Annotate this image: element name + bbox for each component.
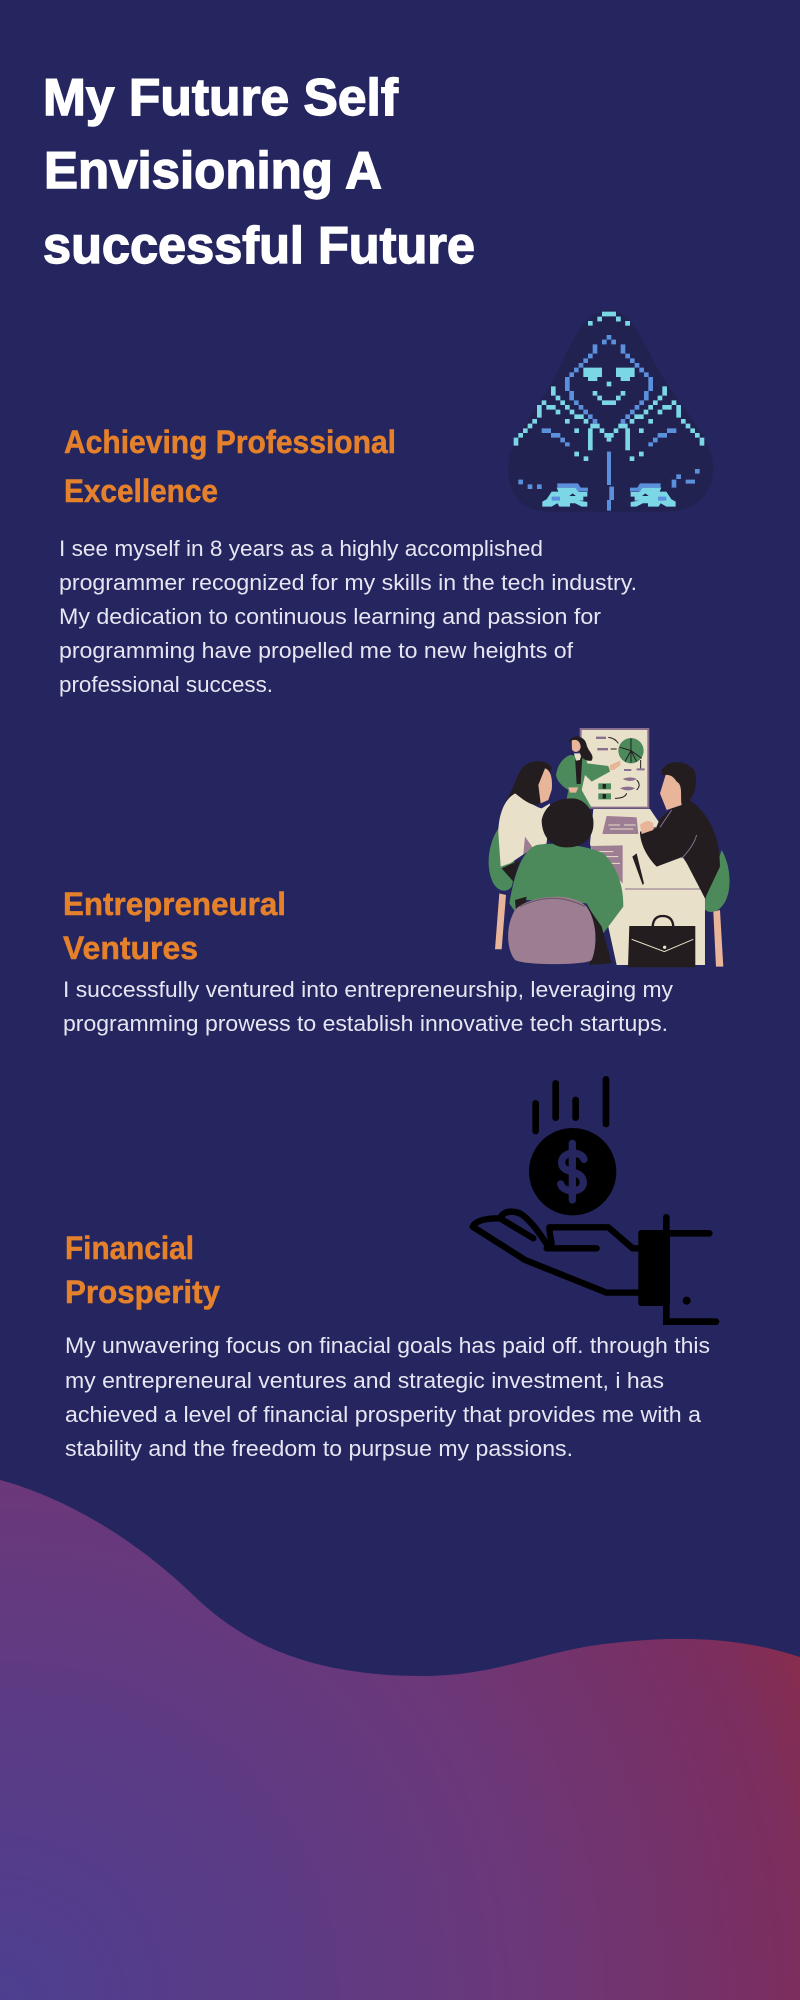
icon: pixel-art hacker in a hood — [508, 310, 713, 512]
heading: Ventures — [63, 930, 198, 966]
section: Achieving Professional Excellence — [59, 424, 637, 697]
section: Entrepreneurial Ventures — [63, 886, 673, 1036]
purple chair — [508, 897, 595, 964]
title: Envisioning A — [44, 142, 382, 200]
body text — [65, 1333, 710, 1461]
body text: professional success. — [59, 672, 273, 697]
body text: my entrepreneural ventures and strategic investment, i has — [65, 1368, 664, 1393]
body text: programming have propelled me to new heights of — [59, 638, 574, 663]
heading — [65, 1230, 220, 1310]
body text: stability and the freedom to purpsue my passions. — [65, 1436, 573, 1461]
gradient wave — [0, 1480, 800, 2000]
briefcase — [653, 916, 673, 927]
body text — [63, 977, 673, 1036]
illustration: team meeting — [489, 729, 730, 967]
table — [590, 809, 705, 965]
heading: Financial — [65, 1230, 194, 1266]
presenter — [556, 755, 610, 808]
body text: My dedication to continuous learning and passion for — [59, 604, 601, 629]
title — [43, 69, 475, 275]
front woman — [509, 844, 623, 933]
left woman — [498, 793, 550, 867]
section: Financial Prosperity — [65, 1230, 710, 1461]
heading: Excellence — [64, 473, 218, 509]
body text: I successfully ventured into entrepreneurship, leveraging my — [63, 977, 673, 1002]
heading — [63, 886, 286, 966]
body text: achieved a level of financial prosperity that provides me with a — [65, 1402, 702, 1427]
body text: programmer recognized for my skills in the tech industry. — [59, 570, 637, 595]
body text — [59, 536, 637, 697]
back chairs — [489, 828, 517, 891]
heading: Achieving Professional — [64, 424, 396, 460]
heading — [64, 424, 396, 509]
icon: hand receiving a dollar coin — [473, 1079, 716, 1322]
title: My Future Self — [43, 69, 399, 127]
papers and pen — [602, 816, 638, 834]
body text: I see myself in 8 years as a highly accomplished — [59, 536, 543, 561]
body text: programming prowess to establish innovative tech startups. — [63, 1011, 668, 1036]
heading: Prosperity — [65, 1274, 220, 1310]
board — [581, 729, 648, 808]
heading: Entrepreneural — [63, 886, 286, 922]
title: successful Future — [43, 217, 475, 275]
right man — [640, 798, 720, 898]
body text: My unwavering focus on finacial goals has paid off. through this — [65, 1333, 710, 1358]
